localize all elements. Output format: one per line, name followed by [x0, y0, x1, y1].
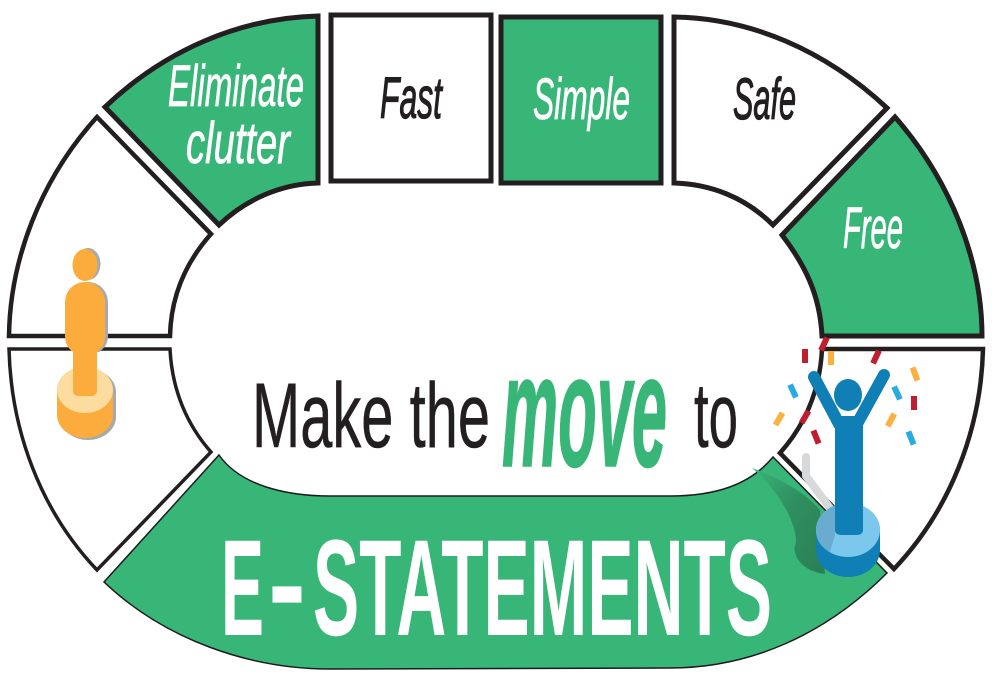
- heading: e-statements: [221, 507, 772, 665]
- heading: make the move to: to: [694, 365, 738, 467]
- panel: safe: [674, 17, 887, 225]
- panel: eliminate clutter: [105, 16, 318, 225]
- icon: player shadow: [752, 457, 830, 574]
- panel: fast: Fast: [380, 66, 444, 131]
- icon: blue celebrating player: [814, 375, 884, 577]
- heading: e-statements: -: [268, 507, 306, 660]
- panel: safe: Safe: [733, 67, 796, 132]
- heading: make the move to: [252, 321, 738, 500]
- icon: orange player piece: [57, 248, 116, 440]
- panel: e-statements banner: [104, 455, 887, 669]
- heading: make the move to: move: [502, 321, 667, 500]
- panel: simple: Simple: [533, 67, 630, 132]
- icon: confetti: [773, 336, 920, 446]
- panel: fast: [331, 15, 491, 181]
- panel: simple: [501, 17, 661, 183]
- panel: eliminate clutter: Eliminate: [168, 54, 304, 119]
- panel: empty square lower left: [9, 349, 211, 570]
- heading: make the move to: Make the: [252, 365, 490, 467]
- panel: free: Free: [843, 196, 903, 261]
- panel: free: [782, 117, 982, 336]
- panel: eliminate clutter: clutter: [186, 111, 292, 176]
- panel: empty square lower right: [780, 349, 983, 569]
- panel: empty square upper left: [9, 117, 211, 336]
- heading: e-statements: E: [221, 512, 264, 665]
